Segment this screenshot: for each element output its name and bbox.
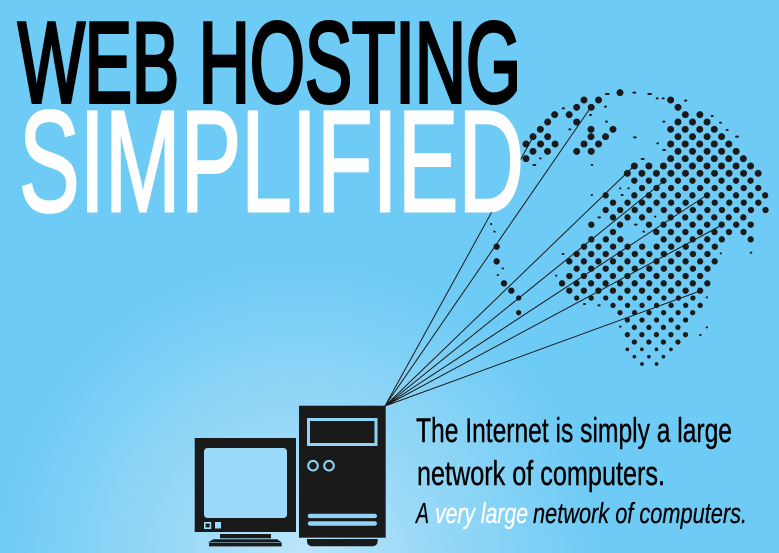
monitor [195, 438, 296, 546]
title [18, 0, 524, 242]
caption line 3: very large [435, 498, 528, 530]
connection lines from computer to globe [385, 107, 722, 406]
caption line 2: network of computers. [417, 455, 665, 493]
tower [299, 406, 386, 546]
caption text [415, 412, 747, 530]
halftone globe [491, 93, 766, 364]
icon: desktop computer [195, 406, 386, 546]
caption line 3: A [415, 498, 429, 530]
caption line 3 [415, 498, 747, 530]
